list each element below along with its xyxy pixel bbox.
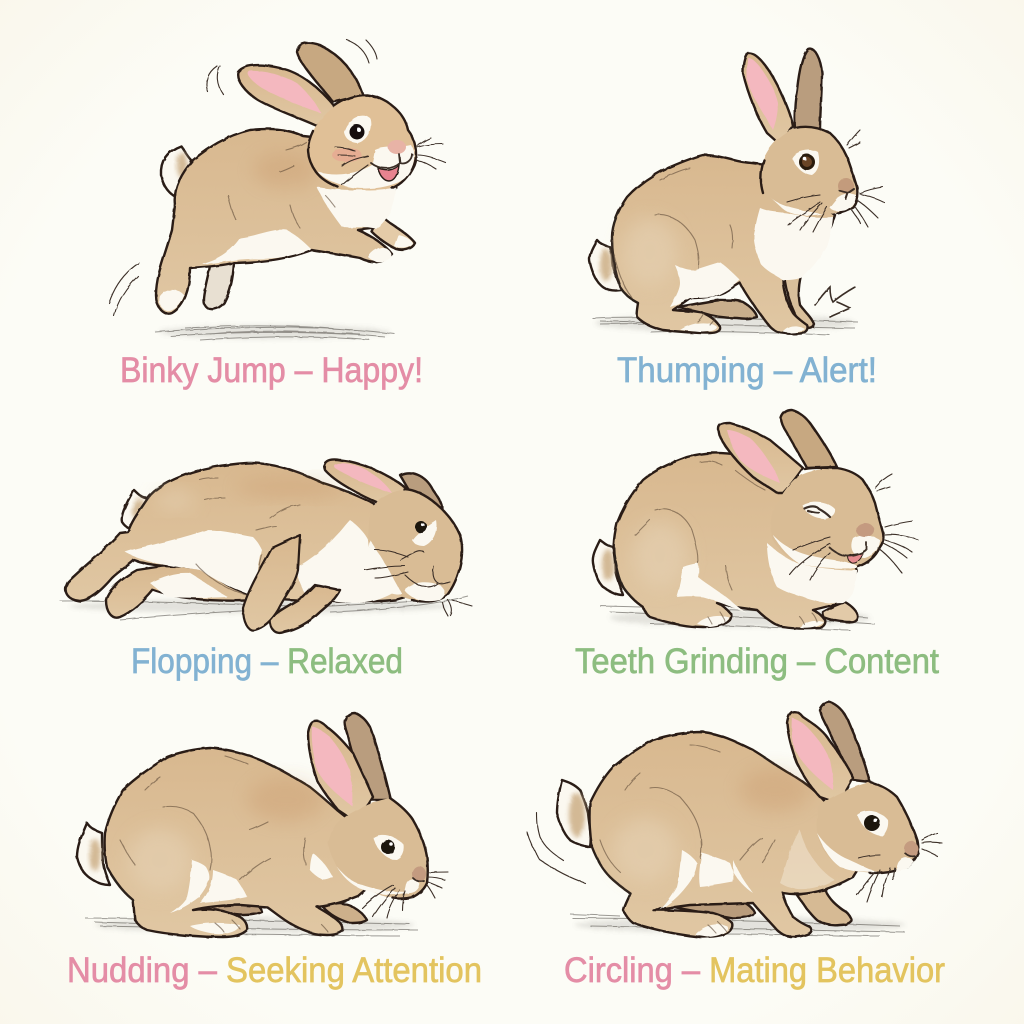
tail	[161, 146, 191, 197]
body shading	[613, 768, 811, 882]
cheek lines and whiskers	[335, 138, 445, 185]
body shading	[253, 152, 317, 188]
motion lines	[109, 40, 377, 316]
label: teeth grinding: Teeth Grinding – Content	[575, 642, 939, 681]
ground shadow	[570, 914, 905, 936]
ground shadow	[592, 314, 858, 335]
chest white	[754, 208, 833, 280]
ground shadow	[600, 606, 875, 630]
hip white	[170, 860, 209, 913]
nose and whiskers	[787, 130, 885, 232]
white chest	[297, 520, 393, 603]
whiskers	[790, 474, 918, 580]
far ear	[781, 410, 837, 468]
far hind foot	[200, 900, 262, 915]
belly white	[200, 870, 247, 903]
belly white	[677, 563, 747, 613]
label: nudding: Nudding – Seeking Attention	[67, 951, 482, 990]
tail	[593, 540, 623, 595]
far ear	[297, 43, 363, 102]
head outline	[870, 782, 918, 873]
motion lines	[527, 813, 585, 883]
mouth and whiskers	[365, 550, 472, 616]
motion marks	[815, 287, 855, 317]
face white	[817, 811, 914, 872]
haunch light	[632, 521, 688, 589]
head outline	[805, 468, 883, 567]
far hind foot	[677, 300, 757, 319]
label: flopping: Flopping – Relaxed	[131, 642, 403, 681]
head outline	[390, 798, 428, 899]
rabbit: nudding	[77, 713, 448, 937]
rabbit: circling	[527, 702, 942, 937]
nose	[904, 841, 918, 857]
blush	[332, 148, 362, 162]
belly white	[670, 262, 740, 307]
closed eye	[804, 506, 830, 517]
face white	[773, 502, 880, 568]
far front paw	[372, 215, 415, 250]
fur marks	[195, 478, 300, 598]
body shading	[128, 778, 323, 892]
near ear	[718, 423, 803, 493]
far front leg	[784, 270, 814, 328]
ground shadow	[155, 325, 395, 340]
fur marks	[635, 461, 817, 625]
near ear	[787, 712, 853, 803]
head outline	[404, 489, 462, 602]
near ear	[308, 721, 373, 820]
fur marks	[228, 142, 335, 228]
white belly	[125, 530, 262, 597]
whiskers	[362, 872, 448, 918]
far ear	[400, 473, 442, 508]
foot whites	[680, 323, 717, 332]
chest and belly white	[317, 186, 396, 229]
face white	[770, 150, 856, 215]
ground shadow	[85, 917, 418, 936]
face white	[337, 835, 420, 895]
face white	[318, 116, 414, 189]
chest white	[695, 830, 835, 937]
haunch light	[622, 218, 678, 286]
rabbit: binky jump	[109, 40, 445, 340]
body	[614, 453, 857, 629]
far front leg	[797, 890, 852, 925]
tail	[557, 780, 591, 847]
far front paw	[323, 903, 367, 923]
head	[328, 798, 428, 899]
near ear	[238, 65, 336, 126]
belly white	[699, 853, 733, 887]
rabbit: teeth grinding	[593, 410, 918, 630]
body	[66, 463, 430, 602]
eye	[415, 521, 427, 533]
eye	[381, 840, 395, 854]
nose and mouth	[371, 140, 412, 181]
tail	[589, 240, 622, 291]
nose and mouth	[830, 523, 874, 563]
body	[156, 129, 397, 314]
body	[105, 748, 400, 937]
far ear	[820, 702, 870, 782]
head outline	[308, 95, 416, 188]
label: binky jump: Binky Jump – Happy!	[120, 351, 423, 390]
chest white	[767, 543, 857, 603]
rabbit: flopping	[60, 459, 472, 633]
fur marks	[120, 756, 328, 932]
nose	[412, 866, 426, 882]
label: circling: Circling – Mating Behavior	[564, 951, 945, 990]
lower hind leg	[106, 565, 262, 618]
ground shadow	[60, 596, 468, 620]
fur marks	[600, 745, 775, 933]
eye	[799, 154, 815, 170]
hip white	[660, 850, 697, 910]
far hind foot	[673, 887, 755, 918]
near ear	[324, 459, 406, 504]
rabbit: thumping	[589, 49, 885, 335]
head	[368, 490, 462, 601]
eye	[350, 124, 364, 140]
tail	[122, 490, 147, 529]
front legs	[243, 535, 340, 633]
whiskers	[857, 833, 942, 902]
foot whites	[697, 616, 824, 628]
chest white	[190, 853, 333, 934]
head	[307, 95, 416, 190]
head	[761, 127, 857, 215]
body shading	[155, 478, 345, 510]
far hind leg	[203, 262, 234, 309]
fur marks	[614, 168, 733, 325]
near ear	[743, 53, 793, 142]
far front paw	[823, 602, 858, 622]
label: thumping: Thumping – Alert!	[617, 351, 877, 390]
head outline	[761, 127, 857, 213]
tail	[77, 823, 110, 885]
far ear	[795, 49, 822, 132]
far ear	[345, 713, 391, 800]
body	[612, 155, 835, 334]
head	[771, 468, 883, 567]
head	[817, 782, 918, 873]
face white	[369, 520, 445, 601]
eye	[864, 815, 880, 831]
body	[590, 732, 870, 937]
